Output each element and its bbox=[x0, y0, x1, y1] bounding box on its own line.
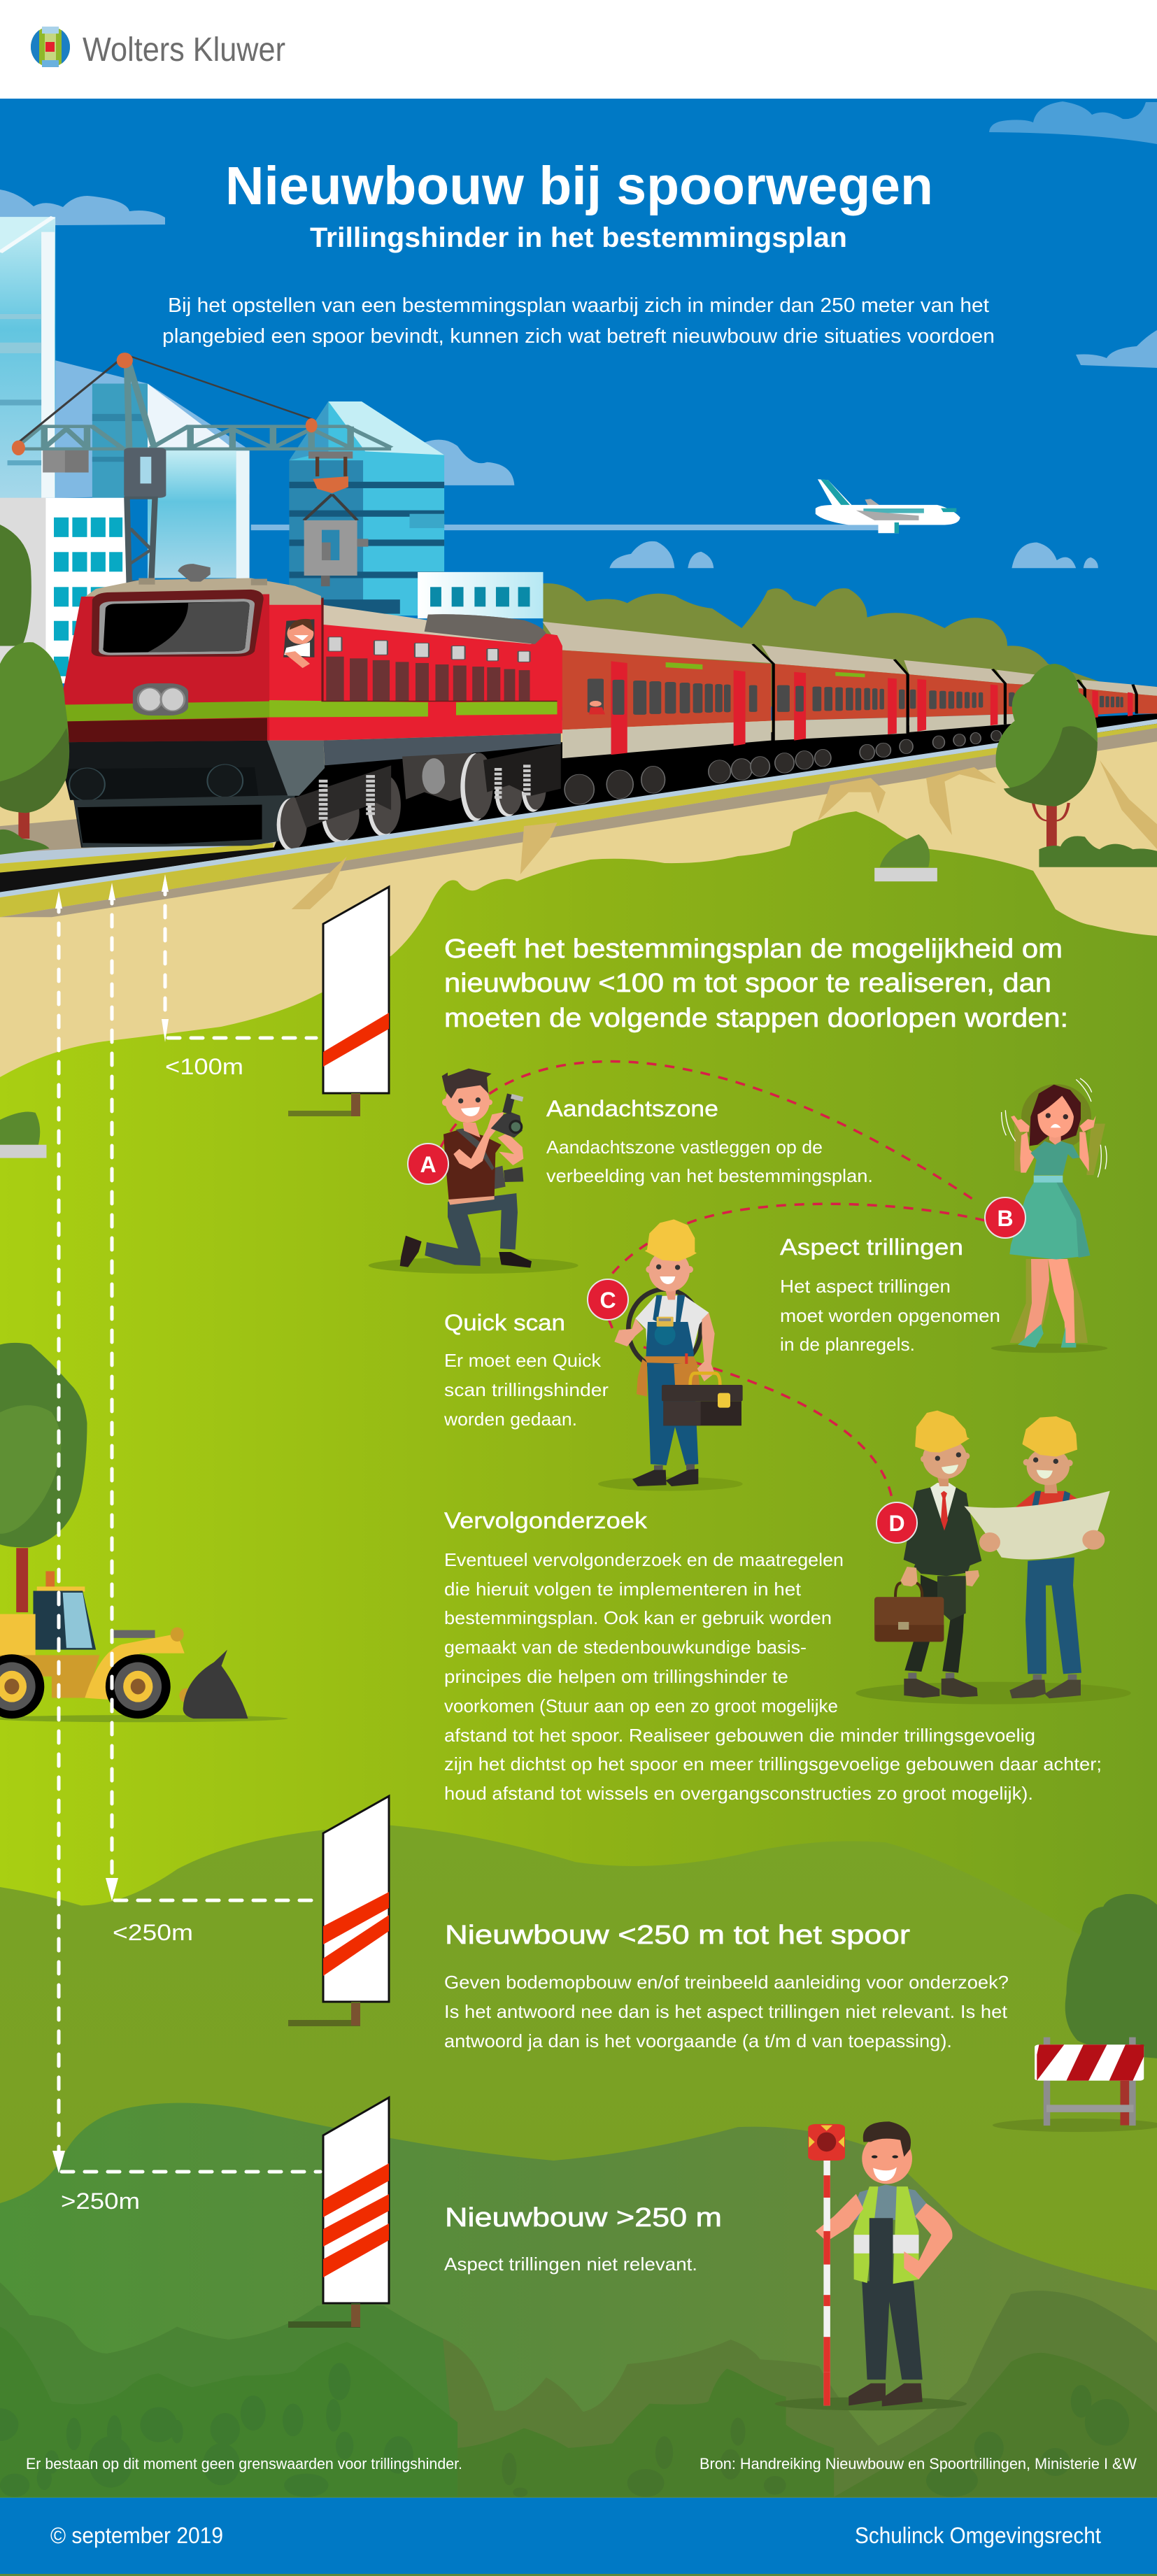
post: 100 m marker bbox=[288, 887, 389, 1116]
subtitle: Trillingshinder in het bestemmingsplan bbox=[310, 222, 847, 253]
carriages bbox=[425, 614, 1157, 758]
step badge A: A bbox=[420, 1152, 436, 1177]
locomotive bbox=[59, 564, 562, 851]
forest bbox=[0, 2282, 1157, 2497]
forest front layer right bbox=[834, 2353, 1157, 2497]
forest front layer left bbox=[0, 2327, 457, 2497]
step D text: bestemmingsplan. Ook kan er gebruik worden bbox=[444, 1607, 832, 1628]
label: under 100 m: <100m bbox=[165, 1054, 243, 1079]
label: under 250 m: <250m bbox=[113, 1920, 193, 1945]
heading: under 100 m: Geeft het bestemmingsplan de mogelijkheid om bbox=[444, 934, 1063, 964]
character: woman with hands at ears bbox=[991, 1079, 1107, 1353]
logo: Wolters Kluwer globe bbox=[31, 27, 70, 67]
intro text bbox=[162, 294, 995, 348]
step A text bbox=[546, 1096, 873, 1186]
tree: left lower and loader bbox=[0, 1343, 288, 1722]
heading: under 100 m: nieuwbouw <100 m tot spoor te realiseren, dan bbox=[444, 969, 1051, 998]
footer: blue bar bbox=[0, 2498, 1157, 2576]
small clouds bbox=[609, 541, 1098, 568]
step B text: Aspect trillingen bbox=[780, 1234, 963, 1260]
step B text: in de planregels. bbox=[780, 1334, 915, 1355]
step D text bbox=[444, 1508, 1102, 1804]
step D text: afstand tot het spoor. Realiseer gebouwen die minder trillingsgevoelig bbox=[444, 1725, 1035, 1746]
section: under 250 m: Is het antwoord nee dan is het aspect trillingen niet relevant. Is het bbox=[444, 2001, 1008, 2022]
step D text: voorkomen (Stuur aan op een zo groot mogelijke bbox=[444, 1695, 838, 1716]
section: under 250 m: Nieuwbouw <250 m tot het spoor bbox=[445, 1921, 910, 1950]
step D text: Eventueel vervolgonderzoek en de maatregelen bbox=[444, 1549, 844, 1570]
cloud behind tower bbox=[425, 440, 514, 485]
ghost vibration shapes bbox=[1009, 1084, 1105, 1343]
section: over 250 m: Aspect trillingen niet relevant. bbox=[444, 2254, 697, 2275]
scene: train and railway bbox=[0, 564, 1157, 917]
step B text: moet worden opgenomen bbox=[780, 1305, 1000, 1326]
header: white logo bar bbox=[0, 0, 1157, 99]
step C text bbox=[443, 1310, 609, 1430]
building: tall glass left bbox=[0, 217, 55, 498]
footer: publisher: Schulinck Omgevingsrecht bbox=[855, 2523, 1101, 2548]
building: white with windows bbox=[0, 498, 127, 683]
building: small low bbox=[418, 572, 543, 618]
label: over 250 m: >250m bbox=[61, 2189, 140, 2214]
contrail bbox=[251, 525, 878, 530]
man in suit bbox=[874, 1411, 981, 1698]
train undercarriage bbox=[273, 713, 1157, 850]
step badge A bbox=[408, 1144, 448, 1184]
road barrier bbox=[993, 2037, 1157, 2132]
heading: under 100 m bbox=[444, 934, 1068, 1033]
man with plan bbox=[964, 1416, 1110, 1698]
step D text: gemaakt van de stedenbouwkundige basis- bbox=[444, 1637, 807, 1658]
step C text: worden gedaan. bbox=[443, 1409, 577, 1430]
logo wordmark: Wolters Kluwer bbox=[83, 31, 285, 69]
airplane bbox=[816, 479, 960, 533]
step B text: Het aspect trillingen bbox=[780, 1276, 951, 1297]
forest front layer centre bbox=[457, 2369, 834, 2497]
step A text: Aandachtszone vastleggen op de bbox=[546, 1137, 823, 1158]
building: central tower bbox=[290, 401, 444, 615]
shrub: right bbox=[1039, 836, 1157, 867]
step badge B bbox=[985, 1197, 1025, 1238]
step badge D: D bbox=[888, 1511, 905, 1536]
character: worker with toolbox bbox=[598, 1219, 743, 1491]
tree trunk bbox=[16, 1548, 28, 1612]
step C text: scan trillingshinder bbox=[444, 1379, 609, 1400]
character: photographer bbox=[369, 1069, 578, 1274]
left rock and stone bbox=[0, 1112, 46, 1158]
building: glass middle bbox=[55, 360, 250, 579]
post: over 250 m marker bbox=[288, 2098, 389, 2328]
section: under 250 m: antwoord ja dan is het voorgaande (a t/m d van toepassing). bbox=[444, 2030, 952, 2051]
step D text: houd afstand tot wissels en overgangsconstructies zo groot mogelijk). bbox=[444, 1783, 1033, 1804]
crane bbox=[12, 353, 391, 586]
hill layer 3 bbox=[0, 2103, 1157, 2498]
step C text: Quick scan bbox=[444, 1310, 565, 1335]
footnote: Er bestaan op dit moment geen grenswaarden voor trillingshinder. bbox=[26, 2455, 462, 2472]
step D text: principes die helpen om trillingshinder te bbox=[444, 1666, 788, 1687]
step badge C bbox=[588, 1279, 628, 1320]
wheel loader bbox=[0, 1571, 288, 1722]
character: surveyor with pole bbox=[775, 2121, 967, 2410]
step B text bbox=[780, 1234, 1000, 1355]
scene: sky objects, buildings and crane bbox=[0, 217, 1157, 706]
bogies bbox=[295, 765, 391, 828]
step C text: Er moet een Quick bbox=[444, 1350, 602, 1371]
step D text: zijn het dichtst op het spoor en meer trillingsgevoelige gebouwen daar achter; bbox=[444, 1753, 1102, 1774]
hill layer 2 bbox=[0, 1826, 1157, 2522]
dashed route connecting steps bbox=[441, 1062, 985, 1502]
step badge B: B bbox=[997, 1206, 1014, 1231]
green hill base bbox=[0, 811, 1157, 2518]
ground: sand bbox=[0, 720, 1157, 1154]
heading: under 100 m: moeten de volgende stappen doorlopen worden: bbox=[444, 1004, 1068, 1033]
distance arrow: over 250 m bbox=[52, 891, 320, 2173]
source: Bron: Handreiking Nieuwbouw en Spoortrillingen, Ministerie I &W bbox=[700, 2455, 1137, 2472]
title: Nieuwbouw bij spoorwegen bbox=[225, 156, 933, 216]
forest back layer bbox=[0, 2282, 1157, 2497]
distance arrow: under 100 m bbox=[162, 874, 316, 1042]
section: under 250 m bbox=[444, 1921, 1009, 2051]
distance arrow: under 250 m bbox=[106, 883, 311, 1901]
locomotive wheels bbox=[277, 753, 546, 851]
tree crown bbox=[0, 1343, 87, 1547]
footer: copyright: © september 2019 bbox=[50, 2523, 223, 2548]
step D text: die hieruit volgen te implementeren in het bbox=[444, 1579, 802, 1600]
tree: left upper bbox=[0, 525, 69, 855]
step A text: Aandachtszone bbox=[546, 1096, 718, 1121]
tree line behind train bbox=[543, 583, 1157, 706]
tree: right bbox=[995, 664, 1098, 848]
intro text: Bij het opstellen van een bestemmingsplan waarbij zich in minder dan 250 meter van het bbox=[168, 294, 989, 317]
sky background bbox=[0, 99, 1157, 938]
step badge D bbox=[876, 1502, 917, 1543]
step badge C: C bbox=[599, 1288, 616, 1313]
clouds bbox=[0, 101, 1157, 368]
section: over 250 m: Nieuwbouw >250 m bbox=[445, 2203, 722, 2233]
rock on the hill bbox=[874, 834, 937, 881]
railway front bands bbox=[0, 719, 1157, 917]
section: under 250 m: Geven bodemopbouw en/of treinbeeld aanleiding voor onderzoek? bbox=[444, 1972, 1009, 1993]
coach wheels bbox=[565, 730, 1002, 804]
train driver bbox=[283, 619, 314, 668]
intro text: plangebied een spoor bevindt, kunnen zich wat betreft nieuwbouw drie situaties voordoen bbox=[162, 325, 995, 348]
section: over 250 m bbox=[444, 2203, 722, 2275]
hills and forest, lower landscape bbox=[0, 1826, 1157, 2522]
railway back bands bbox=[0, 721, 1157, 893]
right bush bbox=[1065, 1894, 1157, 2058]
step A text: verbeelding van het bestemmingsplan. bbox=[546, 1165, 873, 1186]
post: 250 m marker bbox=[288, 1796, 389, 2026]
character: two men with plan bbox=[856, 1411, 1131, 1705]
passenger waving bbox=[589, 701, 605, 714]
sand cracks bbox=[292, 760, 1157, 909]
step D text: Vervolgonderzoek bbox=[444, 1508, 648, 1533]
